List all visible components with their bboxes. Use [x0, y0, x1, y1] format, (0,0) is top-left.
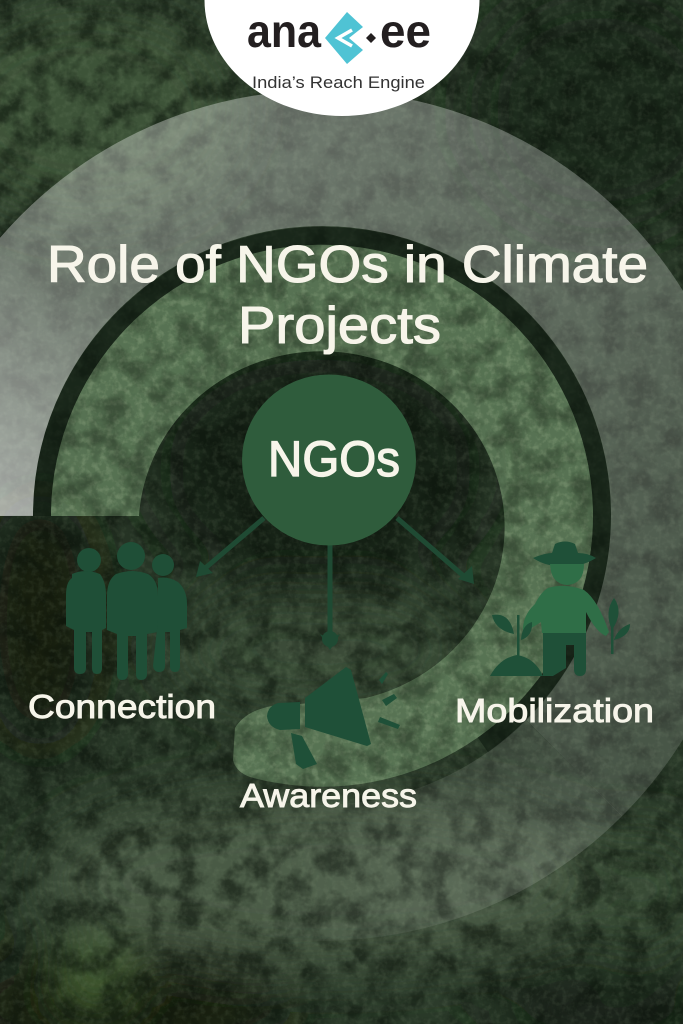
farmer face [550, 564, 584, 585]
arrow: to connection [196, 518, 264, 577]
title: Projects [238, 297, 441, 355]
logo badge [204, 0, 480, 116]
icon: farmer with plants [490, 542, 630, 676]
soil mound [490, 655, 543, 676]
right sprout [608, 598, 630, 654]
title [47, 236, 648, 355]
farmer hat [533, 542, 596, 566]
label: Connection: Connection [28, 688, 216, 725]
logo wordmark: ee: ee [380, 5, 431, 57]
farmer trousers [543, 633, 586, 676]
arrow: to mobilization [397, 518, 474, 584]
icon: people group [66, 542, 187, 680]
white badge shape [204, 0, 480, 116]
label: Awareness: Awareness [240, 777, 417, 814]
farmer shirt [523, 586, 609, 636]
NGOs circle [242, 374, 416, 546]
tagline: India’s Reach Engine [252, 73, 425, 92]
logo wordmark: ana: ana [247, 5, 321, 57]
arrow: to awareness [320, 545, 340, 650]
panel: inner lighter arc [51, 244, 593, 787]
icon: megaphone [267, 667, 400, 769]
logo mark: teal diamond [325, 12, 376, 64]
panel: outer translucent arc [0, 158, 679, 873]
dark gap ring between the arcs [42, 236, 602, 745]
title: Role of NGOs in Climate [47, 236, 648, 294]
label: Mobilization: Mobilization [455, 692, 654, 729]
NGOs label: NGOs [268, 431, 400, 487]
left sprout [492, 615, 532, 657]
